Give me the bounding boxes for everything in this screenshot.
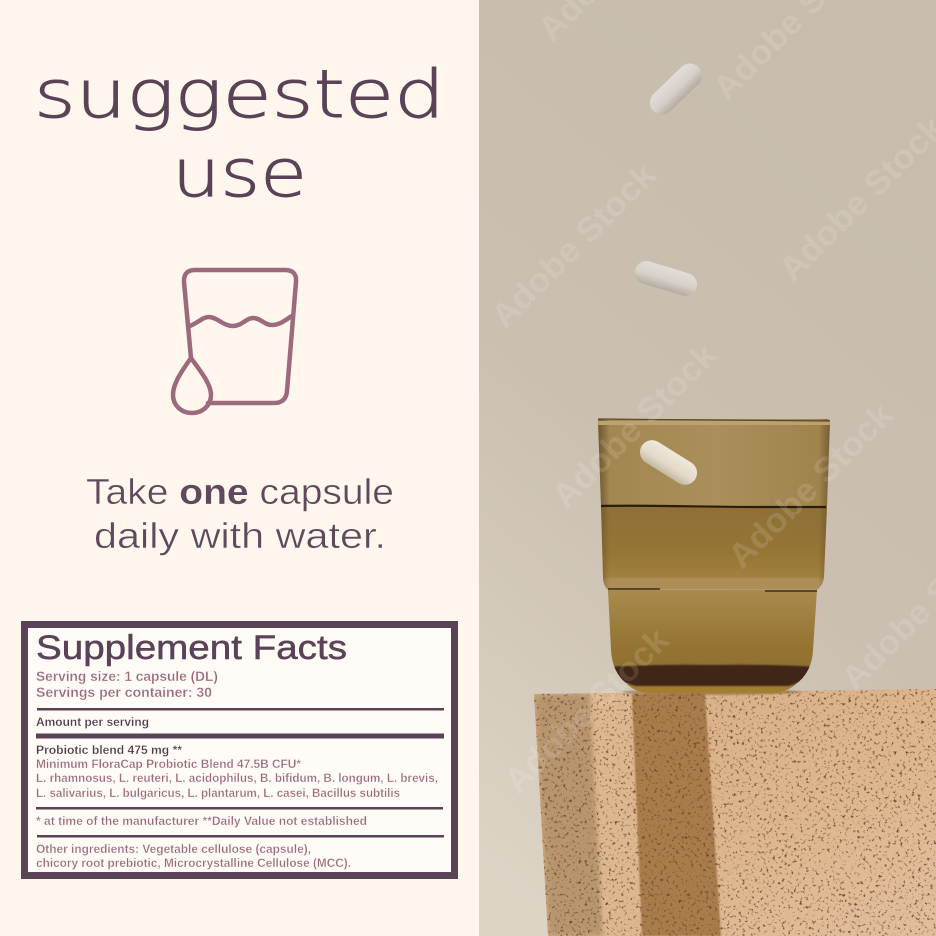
other ingredients: chicory root prebiotic, Microcrystalline Cellulose (MCC). bbox=[36, 857, 351, 870]
probiotic blend details: L. salivarius, L. bulgaricus, L. plantarum, L. casei, Bacillus subtilis bbox=[36, 787, 400, 800]
probiotic blend details: Probiotic blend 475 mg ** bbox=[36, 744, 182, 757]
panel: product photo bbox=[479, 0, 936, 936]
serving information bbox=[36, 669, 218, 700]
divider lines bbox=[36, 708, 444, 838]
other ingredients: Other ingredients: Vegetable cellulose (capsule), bbox=[36, 843, 311, 856]
instruction text: daily with water. bbox=[94, 515, 386, 556]
stock watermark: Adobe Stock bbox=[484, 156, 663, 336]
amount per serving: Amount per serving bbox=[36, 716, 149, 729]
capsule: middle falling bbox=[635, 261, 697, 296]
heading: supplement facts: Supplement Facts bbox=[36, 629, 347, 667]
instruction text bbox=[86, 471, 394, 556]
capsule: top falling bbox=[650, 64, 702, 114]
probiotic blend details bbox=[36, 744, 438, 800]
panel frame bbox=[24, 624, 454, 876]
stock watermark bbox=[484, 0, 936, 801]
stock watermark: Adobe Stock bbox=[721, 396, 900, 576]
photo wall background bbox=[479, 0, 936, 936]
stock watermark: Adobe Stock bbox=[497, 621, 676, 801]
title: suggested use: suggested bbox=[34, 56, 445, 133]
instruction text: Take one capsule bbox=[86, 471, 394, 512]
panel: supplement facts bbox=[24, 624, 454, 876]
brick pedestal bbox=[520, 680, 936, 936]
capsule: inside glass bbox=[640, 440, 697, 485]
left background panel bbox=[0, 0, 479, 936]
stock watermark: Adobe Stock bbox=[545, 336, 724, 516]
footnote: * at time of the manufacturer **Daily Value not established bbox=[36, 815, 367, 828]
title: suggested use: use bbox=[172, 135, 307, 212]
amber glass bbox=[595, 415, 835, 700]
title: suggested use bbox=[34, 56, 445, 212]
other ingredients bbox=[36, 843, 351, 870]
probiotic blend details: L. rhamnosus, L. reuteri, L. acidophilus, B. bifidum, B. longum, L. brevis, bbox=[36, 772, 438, 785]
serving information: Servings per container: 30 bbox=[36, 685, 212, 700]
probiotic blend details: Minimum FloraCap Probiotic Blend 47.5B CFU* bbox=[36, 758, 301, 771]
icon: glass of water with drop bbox=[173, 270, 296, 413]
serving information: Serving size: 1 capsule (DL) bbox=[36, 669, 218, 684]
